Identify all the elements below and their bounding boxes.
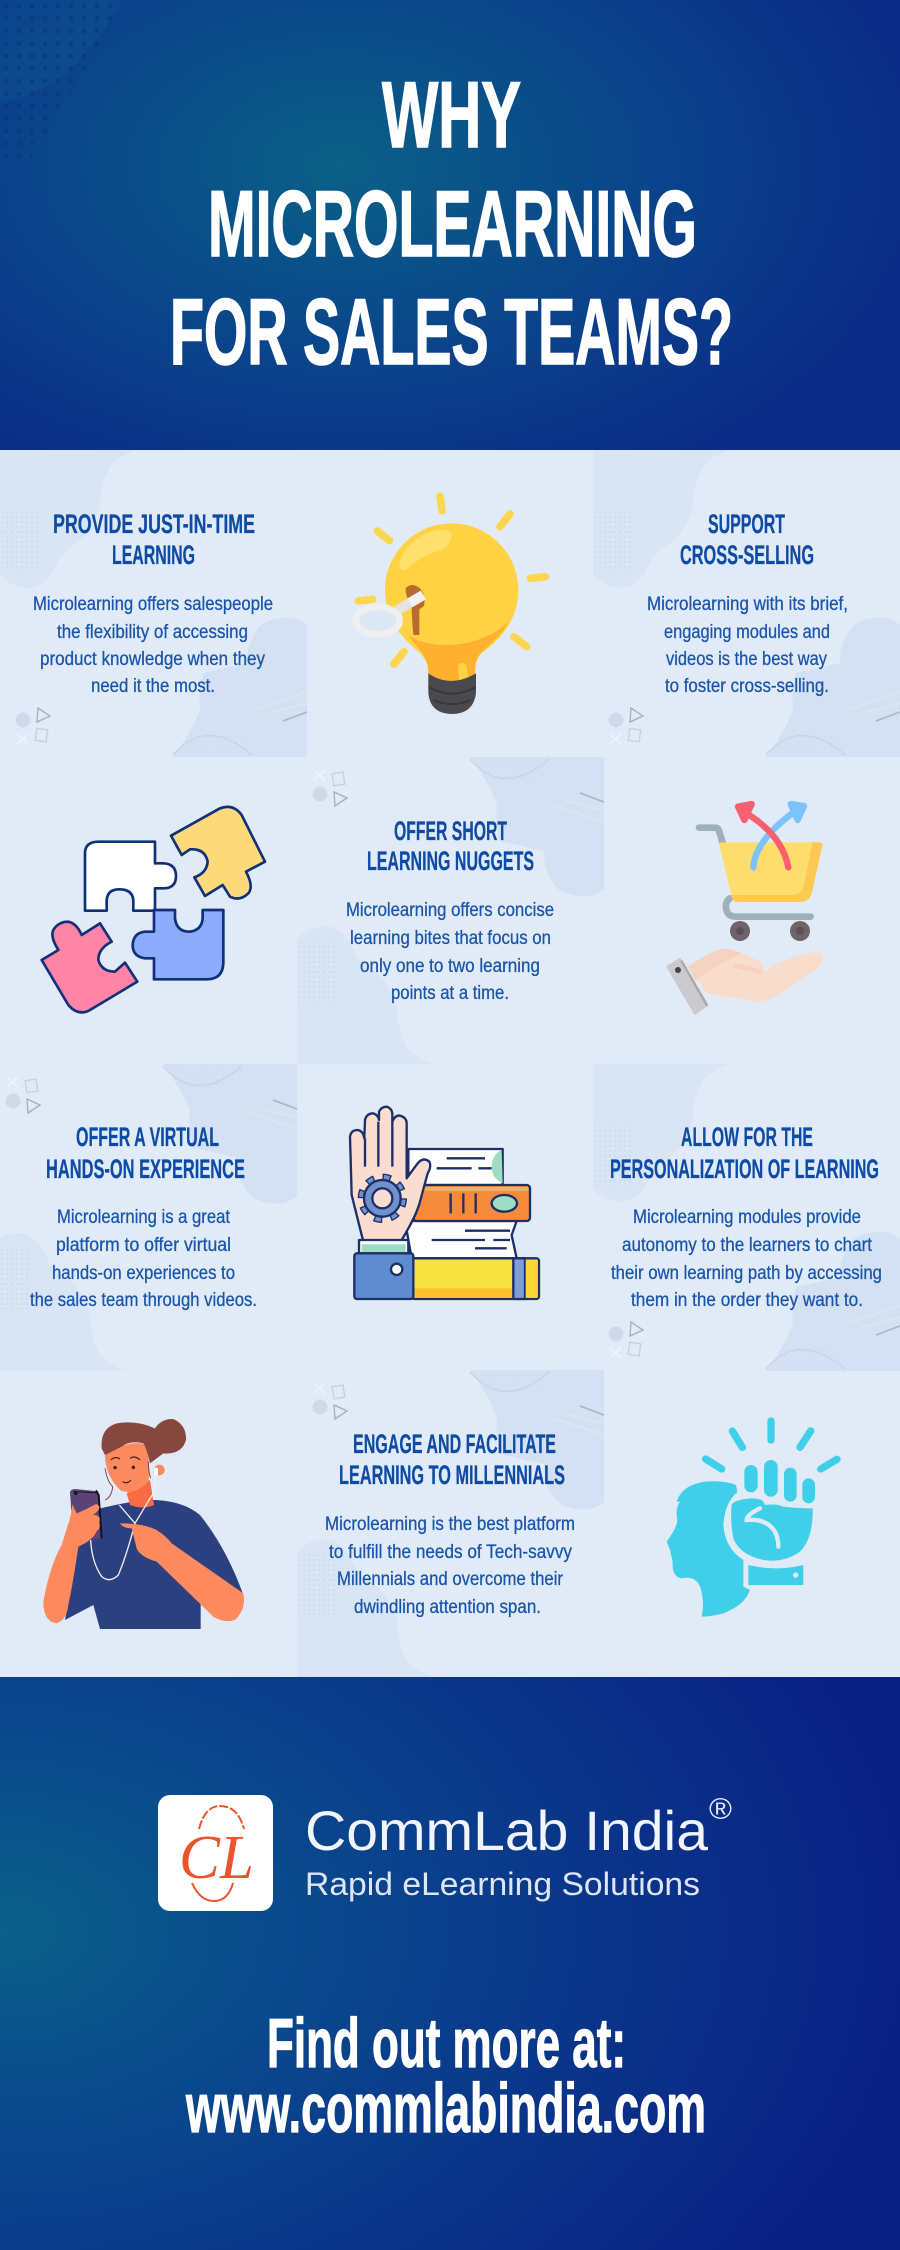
body text [325,1513,575,1618]
arrow: red [738,804,788,867]
icon: shopping cart over hand [667,804,823,1014]
heading: HANDS-ON EXPERIENCE [46,1154,245,1184]
body text: Microlearning modules provide [633,1206,861,1228]
body text: to foster cross-selling. [665,675,829,697]
body text: Millennials and overcome their [337,1568,563,1590]
body text: the sales team through videos. [30,1289,257,1311]
body text [33,593,273,697]
panel: provide just-in-time learning [0,450,307,757]
body text: Microlearning with its brief, [647,593,848,615]
heading: LEARNING TO MILLENNIALS [339,1460,565,1490]
title: WHY [382,62,521,167]
arrow: blue [753,804,804,867]
heading: ALLOW FOR THE [681,1122,813,1152]
body text: dwindling attention span. [354,1596,541,1618]
body text: Microlearning offers salespeople [33,593,273,615]
icon: light bulb with key [356,496,545,714]
gear [361,1177,404,1220]
icon: puzzle pieces [42,807,265,1012]
heading: ENGAGE AND FACILITATE [353,1429,556,1459]
body text: the flexibility of accessing [57,621,248,643]
body text [611,1206,882,1311]
body text: autonomy to the learners to chart [622,1234,872,1256]
panel: support cross-selling [593,450,900,757]
heading: SUPPORT [708,509,785,539]
body text: product knowledge when they [40,648,265,670]
body text: Microlearning is a great [57,1206,230,1228]
heading: OFFER SHORT [394,816,507,846]
heading: LEARNING [112,540,195,570]
body text: points at a time. [391,982,509,1004]
panel: offer short learning nuggets [297,757,604,1064]
heading [680,509,814,570]
yellow piece [171,807,265,899]
title [170,62,733,384]
heading: PROVIDE JUST-IN-TIME [53,509,255,539]
panel: engage and facilitate learning to millennials [297,1370,604,1677]
body text [30,1206,257,1311]
pink piece [42,922,137,1012]
icon: woman with phone and earphones [43,1419,244,1629]
heading: LEARNING NUGGETS [367,846,534,876]
heading [367,816,534,876]
heading [46,1122,245,1184]
body text: Microlearning offers concise [346,899,554,921]
body text [647,593,848,697]
phone [70,1489,102,1540]
heading [610,1122,879,1184]
body text: only one to two learning [360,955,540,977]
footer banner [0,1677,900,2250]
logo [158,1793,732,1911]
tagline: Rapid eLearning Solutions [305,1866,700,1902]
body text: need it the most. [91,675,215,697]
body text: them in the order they want to. [631,1289,863,1311]
company name: CommLab India [305,1799,709,1862]
body text: to fulfill the needs of Tech-savvy [329,1541,572,1563]
body text [346,899,554,1004]
heading: OFFER A VIRTUAL [76,1122,219,1152]
panel: offer a virtual hands-on experience [0,1064,297,1371]
icon: head with raised fist [667,1421,837,1617]
body text: platform to offer virtual [56,1234,231,1256]
body text: videos is the best way [666,648,827,670]
logo badge [158,1795,273,1911]
logo badge: CL [179,1824,254,1892]
heading [339,1429,565,1490]
body text: engaging modules and [664,621,830,643]
blue piece [133,910,223,979]
call to action: Find out more at: [267,2004,626,2082]
body text: hands-on experiences to [52,1262,235,1284]
call to action [185,2004,706,2147]
body text: Microlearning is the best platform [325,1513,575,1535]
panel: allow for the personalization of learning [593,1064,900,1371]
icon: hand with gear and books [350,1107,539,1299]
heading [53,509,255,570]
header banner [0,0,900,450]
body text: learning bites that focus on [350,927,551,949]
registered mark: ® [709,1793,732,1826]
heading: CROSS-SELLING [680,540,814,570]
white piece [85,842,176,911]
